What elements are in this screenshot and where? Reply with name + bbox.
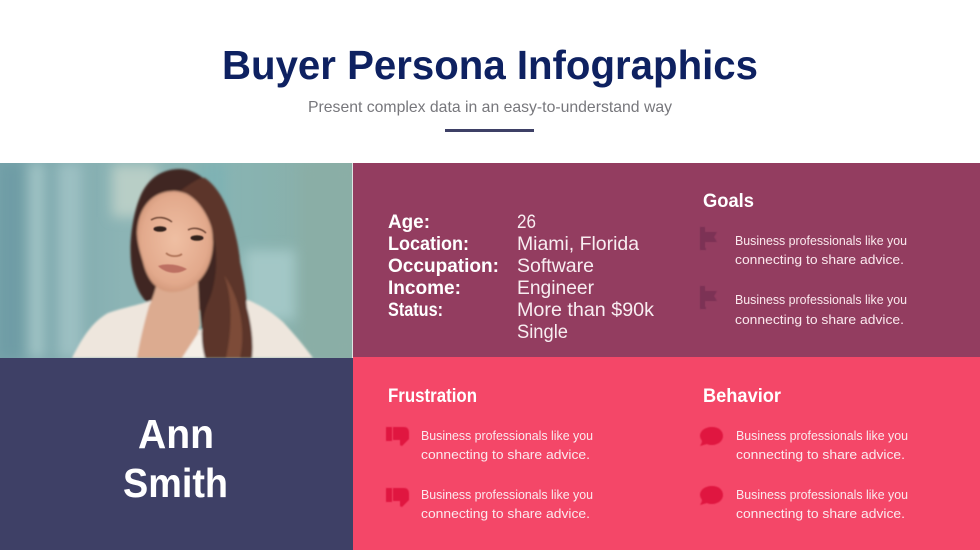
frustration text 2: Business professionals like you <box>421 487 593 502</box>
panel: frustration and behavior <box>353 357 980 550</box>
panel: goals <box>700 191 907 327</box>
profile values: Engineer <box>517 277 594 299</box>
chest <box>137 278 200 358</box>
nose <box>166 253 182 256</box>
profile values: More than $90k <box>517 299 654 321</box>
hair back <box>128 168 248 328</box>
goals text 1: Business professionals like you <box>735 233 907 248</box>
icon: thumbs down <box>386 427 409 446</box>
goals text 1 <box>735 233 907 267</box>
frustration text 1: Business professionals like you <box>421 428 593 443</box>
panel: profile details <box>353 163 980 357</box>
behavior text 2 <box>736 487 908 521</box>
icon: flag <box>700 227 717 250</box>
profile labels: Income: <box>388 278 461 299</box>
frustration text 2 <box>421 487 593 521</box>
icon: speech bubble <box>700 427 723 446</box>
face <box>137 191 213 292</box>
title: Buyer Persona Infographics <box>222 42 758 88</box>
behavior text 2: connecting to share advice. <box>736 506 905 521</box>
behavior text 2: Business professionals like you <box>736 487 908 502</box>
goals text 2 <box>735 292 907 327</box>
frustration text 1: connecting to share advice. <box>421 447 590 462</box>
hair right front <box>180 178 253 358</box>
profile values: Single <box>517 321 568 343</box>
panel: name <box>0 358 353 550</box>
subtitle: Present complex data in an easy-to-understand way <box>308 99 672 116</box>
title underline <box>445 129 534 132</box>
icon: thumbs down <box>386 488 409 507</box>
behavior text 1: connecting to share advice. <box>736 447 905 462</box>
goals text 1: connecting to share advice. <box>735 252 904 267</box>
eyes <box>154 226 166 232</box>
goals text 2: Business professionals like you <box>735 292 907 307</box>
lips <box>158 264 187 273</box>
icon: flag <box>700 286 717 309</box>
name text: Smith <box>123 460 228 506</box>
behavior text 1: Business professionals like you <box>736 428 908 443</box>
heading: frustration: Frustration <box>388 386 477 407</box>
behavior text 1 <box>736 428 908 462</box>
photo edge <box>352 163 353 358</box>
name text <box>123 411 228 506</box>
profile labels: Location: <box>388 234 469 255</box>
heading: behavior: Behavior <box>703 386 782 407</box>
profile values: 26 <box>517 211 536 233</box>
brows <box>151 218 172 222</box>
name text: Ann <box>138 411 214 457</box>
icon: speech bubble <box>700 486 723 505</box>
profile labels: Age: <box>388 212 430 233</box>
profile values: Software <box>517 255 594 277</box>
goals text 2: connecting to share advice. <box>735 312 904 327</box>
shoulders <box>72 300 313 358</box>
profile labels: Status: <box>388 300 443 321</box>
heading: goals: Goals <box>703 191 754 212</box>
profile labels <box>388 212 499 321</box>
profile values: Miami, Florida <box>517 233 639 255</box>
panel: portrait photo <box>0 163 353 358</box>
frustration text 1 <box>421 428 593 462</box>
profile labels: Occupation: <box>388 256 499 277</box>
profile values <box>517 211 654 343</box>
frustration text 2: connecting to share advice. <box>421 506 590 521</box>
